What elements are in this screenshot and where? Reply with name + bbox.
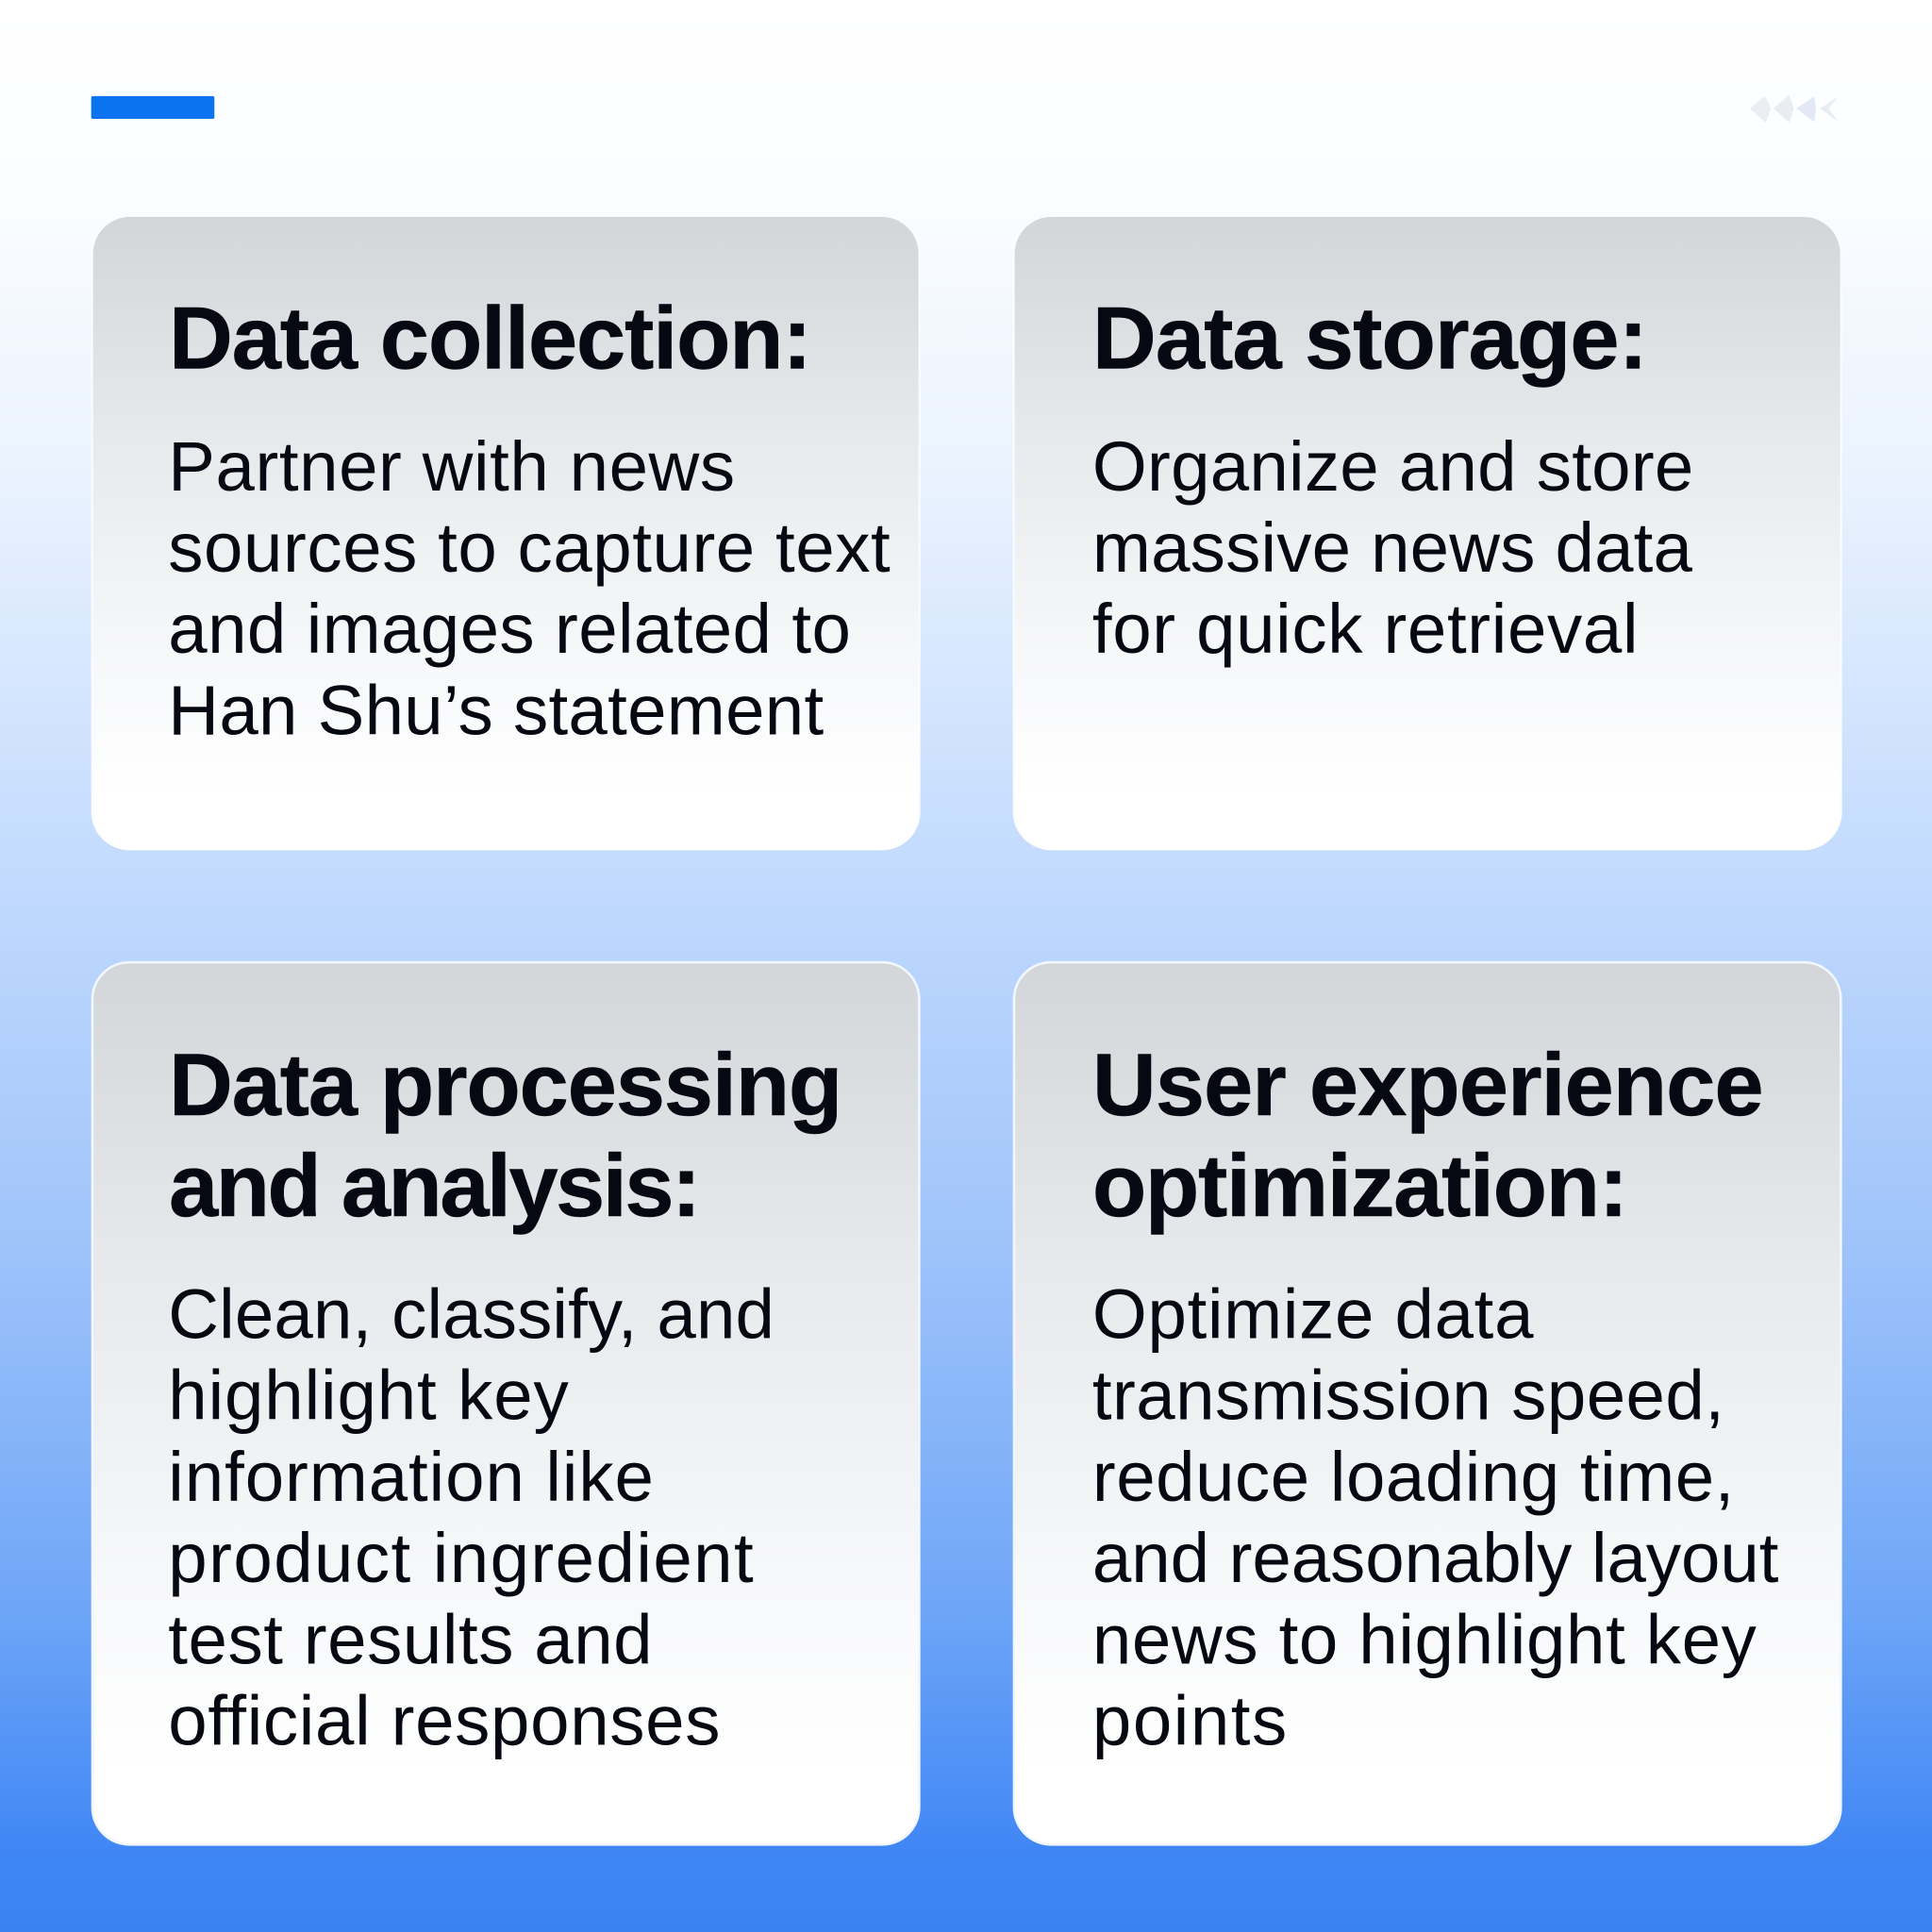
heading: user experience optimization — [1092, 1035, 1764, 1235]
heading: user experience optimization: optimization: — [1092, 1136, 1628, 1235]
text: data processing description: Clean, classify, and — [168, 1274, 774, 1353]
text: user experience description: and reasonably layout — [1092, 1519, 1779, 1597]
text: data processing description — [168, 1274, 774, 1759]
text: data storage description: Organize and store — [1092, 427, 1693, 506]
accent bar — [92, 96, 214, 119]
icon: faint chevrons — [1750, 95, 1839, 123]
heading: user experience optimization: User experience — [1092, 1035, 1764, 1134]
text: user experience description: news to highlight key — [1092, 1600, 1757, 1678]
text: data collection description: Partner with news — [168, 427, 735, 506]
text: data processing description: official responses — [168, 1681, 720, 1759]
text: user experience description — [1092, 1274, 1779, 1759]
heading: data collection: Data collection: — [169, 289, 812, 388]
text: data collection description — [168, 427, 891, 749]
text: data storage description: for quick retrieval — [1092, 590, 1638, 668]
text: data processing description: information like — [168, 1438, 654, 1516]
text: data collection description: Han Shu’s statement — [168, 671, 824, 749]
panel: user experience optimization — [1014, 962, 1840, 1844]
text: user experience description: points — [1092, 1681, 1287, 1759]
text: user experience description: reduce loading time, — [1092, 1438, 1734, 1516]
text: data processing description: highlight key — [168, 1357, 570, 1435]
text: user experience description: transmission speed, — [1092, 1357, 1724, 1435]
panel: data collection — [92, 217, 921, 850]
text: data processing description: product ingredient — [168, 1519, 754, 1597]
panel: data storage — [1013, 217, 1842, 850]
text: user experience description: Optimize data — [1092, 1274, 1534, 1353]
text: data collection description: and images related to — [168, 590, 851, 668]
text: data storage description: massive news data — [1092, 508, 1693, 587]
text: data collection description: sources to capture text — [168, 508, 891, 587]
heading: data storage: Data storage: — [1092, 289, 1648, 388]
panel: data processing and analysis — [92, 962, 919, 1844]
text: data storage description — [1092, 427, 1693, 668]
heading: data processing and analysis — [169, 1035, 842, 1235]
text: data processing description: test results and — [168, 1600, 653, 1678]
heading: data processing and analysis: Data processing — [169, 1035, 842, 1134]
heading: data processing and analysis: and analysis: — [169, 1136, 701, 1235]
